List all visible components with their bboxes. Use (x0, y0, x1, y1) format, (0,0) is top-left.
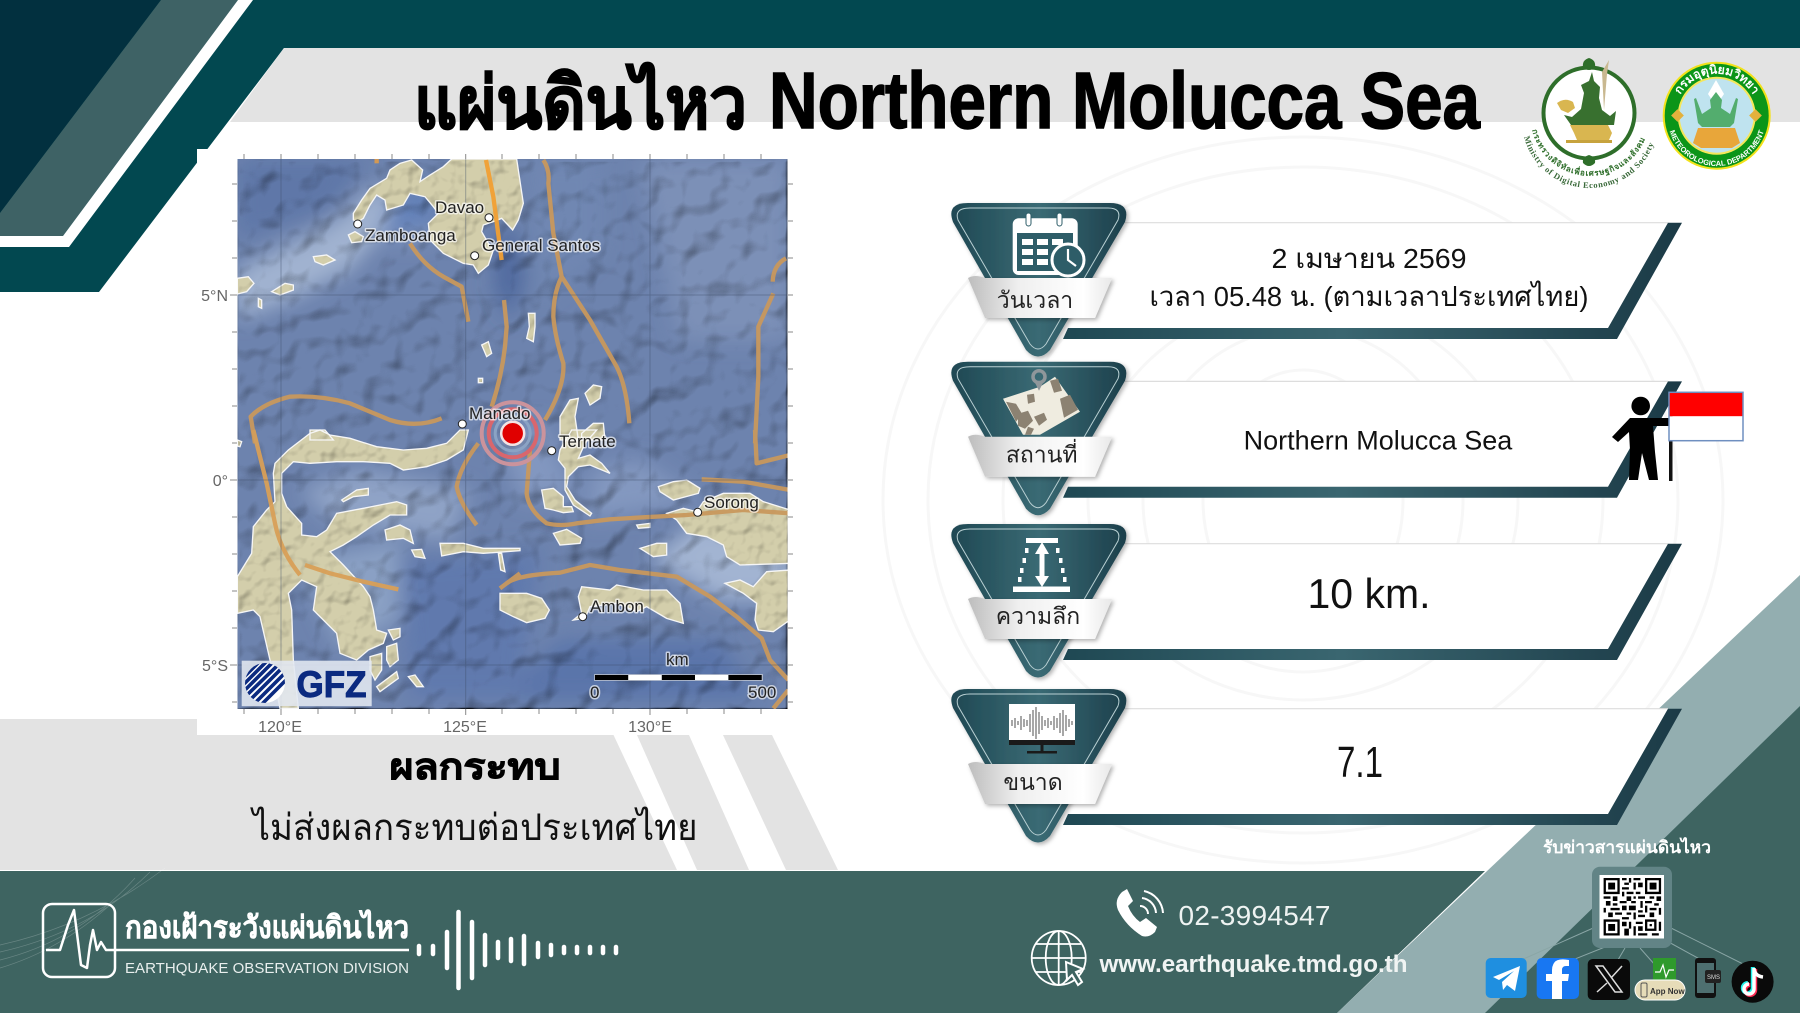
corner decoration: top band and slanted stripes (0, 0, 1800, 292)
scale bar: 500 (748, 683, 776, 702)
map ticks and axis labels: 5°S (202, 658, 228, 675)
footer decorative waves (0, 868, 165, 968)
map ticks and axis labels (201, 154, 793, 736)
logo: Meteorological Department (1662, 62, 1771, 170)
right corner diagonal (1337, 575, 1800, 1013)
scale bar: km (666, 650, 689, 669)
scale bar (590, 650, 776, 702)
shield (951, 689, 1126, 842)
logo: Ministry of Digital Economy and Society (1524, 58, 1682, 188)
epicentre (482, 402, 544, 464)
row: depth (951, 524, 1682, 678)
sound wave bars (419, 912, 616, 988)
card: 2 เมษายน 2569 (1272, 243, 1466, 274)
card (1060, 709, 1682, 825)
city markers and labels: General Santos (482, 236, 600, 255)
city markers and labels: Manado (469, 404, 530, 423)
card: Northern Molucca Sea (1244, 426, 1513, 456)
map ticks and axis labels: 5°N (201, 288, 228, 305)
icon: SMS phone (1695, 958, 1721, 998)
connector lines from QR to channels (1510, 925, 1745, 965)
bottom-left impact panel background (0, 719, 838, 870)
row: location (951, 362, 1682, 515)
shield (951, 362, 1126, 515)
ribbon label: วันเวลา (997, 287, 1073, 313)
footer band (0, 871, 1485, 1013)
ribbon (968, 762, 1112, 804)
shield (951, 524, 1126, 678)
row: magnitude (951, 689, 1682, 842)
shield outline (957, 208, 1119, 349)
logo: Ministry of Digital Economy and Society: กระทรวงดิจิทัลเพื่อเศรษฐกิจและสังคม (1532, 129, 1646, 176)
icon: app download (1635, 958, 1685, 1000)
shield outline (957, 529, 1119, 670)
icon: monitor with seismogram (1009, 704, 1075, 754)
card (1060, 544, 1682, 660)
tectonic fault lines (251, 159, 790, 708)
text: impact statement: ไม่ส่งผลกระทบต่อประเทศไทย (250, 806, 698, 848)
row: date and time (951, 203, 1682, 356)
subscribe heading: รับข่าวสารแผ่นดินไหว (1543, 837, 1711, 857)
QR code (1592, 867, 1672, 948)
ribbon (968, 597, 1112, 639)
map ticks and axis labels: 0° (213, 473, 228, 490)
title (414, 56, 1480, 145)
icon: GFZ globe (245, 663, 285, 703)
card (1060, 381, 1682, 498)
city markers and labels: Davao (435, 198, 484, 217)
icon: globe with cursor (1032, 931, 1086, 985)
GFZ logo (241, 659, 372, 706)
grid (237, 159, 788, 709)
website: www.earthquake.tmd.go.th (1098, 951, 1408, 978)
map ticks and axis labels: 120°E (258, 719, 302, 736)
icon: calendar with clock (1013, 213, 1084, 276)
logo: Meteorological Department: METEOROLOGICAL DEPARTMENT (1670, 130, 1764, 166)
shield outline (957, 367, 1119, 508)
map panel (197, 149, 812, 736)
background rings (883, 137, 1723, 863)
title: Northern Molucca Sea (769, 56, 1480, 145)
card: 7.1 (1337, 738, 1383, 787)
map ticks and axis labels: 130°E (628, 719, 672, 736)
icon: TikTok (1732, 961, 1774, 1003)
footer logo: Earthquake Observation Division: EARTHQUAKE OBSERVATION DIVISION (125, 960, 409, 977)
card (1060, 223, 1682, 339)
shield outline (957, 694, 1119, 835)
icon: X (1588, 959, 1630, 1000)
footer logo: Earthquake Observation Division (43, 904, 409, 977)
GFZ logo: GFZ (296, 664, 366, 705)
city markers and labels: Sorong (704, 493, 759, 512)
icon: depth arrow (1013, 538, 1070, 592)
icon: person holding Indonesian flag (1612, 392, 1743, 481)
ribbon (968, 435, 1112, 477)
shield (951, 203, 1126, 356)
icon: SMS phone: SMS (1707, 975, 1720, 981)
logo: Ministry of Digital Economy and Society: Ministry of Digital Economy and Society (1524, 135, 1654, 188)
map ticks and axis labels: 125°E (443, 719, 487, 736)
icon: app download: App Now (1650, 987, 1685, 996)
icon: folded map with pin (1003, 371, 1080, 435)
icon: Telegram (1486, 958, 1527, 998)
icon: phone (1117, 889, 1163, 936)
map sea and land (237, 159, 790, 710)
city markers and labels: Ternate (559, 432, 616, 451)
city markers and labels (354, 198, 759, 621)
card: 10 km. (1308, 570, 1430, 617)
city markers and labels: Ambon (590, 597, 644, 616)
icon: seismograph box (43, 904, 409, 977)
icon: Facebook (1537, 958, 1579, 999)
footer logo: Earthquake Observation Division: กองเฝ้าระวังแผ่นดินไหว (125, 909, 409, 945)
heading: impact: ผลกระทบ (390, 746, 560, 787)
ribbon (968, 276, 1112, 318)
card: เวลา 05.48 น. (ตามเวลาประเทศไทย) (1150, 281, 1588, 312)
ribbon label: สถานที่ (1006, 439, 1078, 468)
ribbon label: ขนาด (1003, 769, 1063, 795)
logo: Meteorological Department: กรมอุตุนิยมวิทยา (1676, 64, 1758, 94)
title: แผ่นดินไหว (414, 61, 747, 144)
ribbon label: ความลึก (996, 603, 1080, 629)
scale bar: 0 (590, 683, 599, 702)
title bar (230, 48, 1800, 122)
phone number: 02-3994547 (1178, 900, 1330, 931)
city markers and labels: Zamboanga (365, 226, 456, 245)
